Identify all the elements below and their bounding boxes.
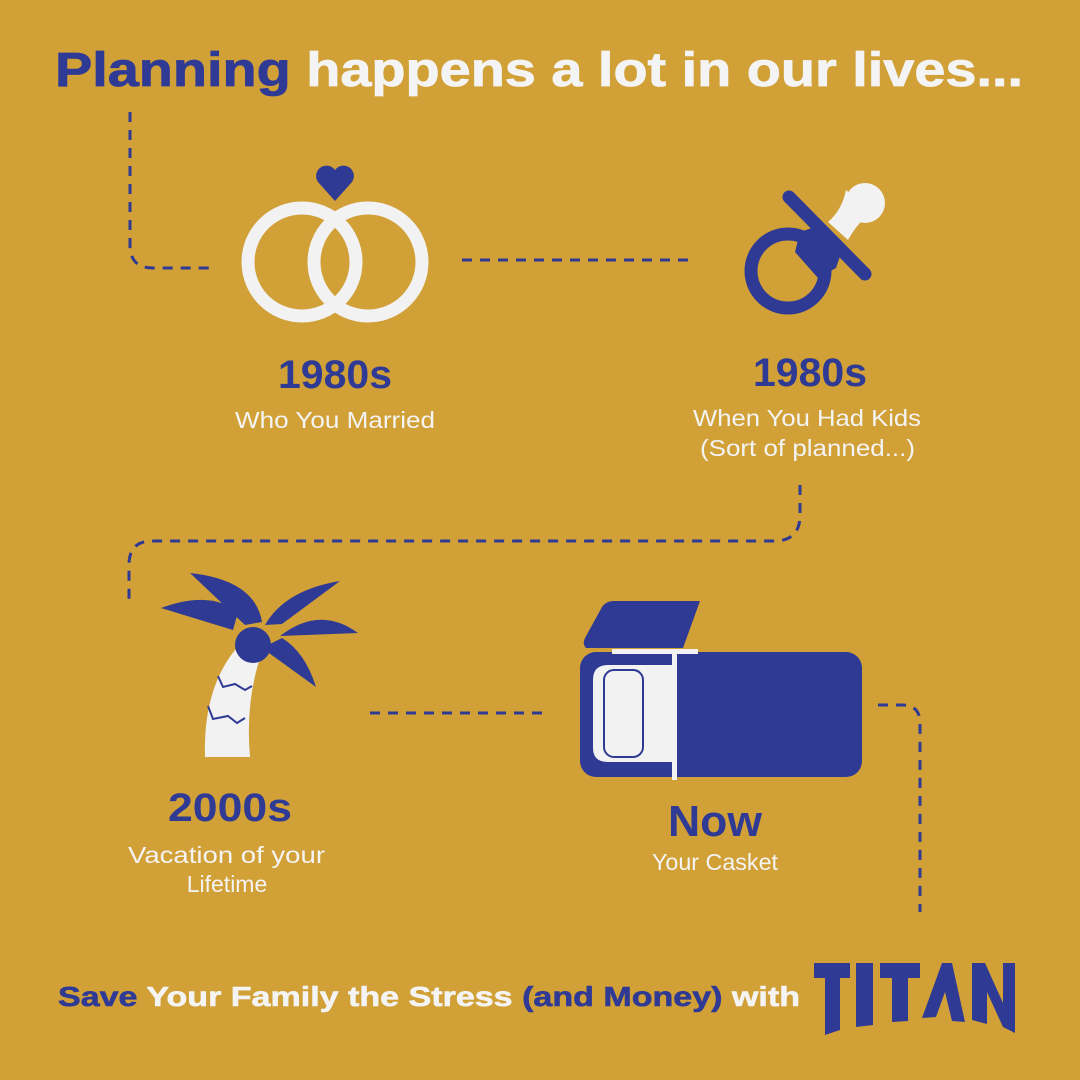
dashed path 3 [129, 485, 800, 602]
title: Planning happens a lot in our lives... [55, 44, 1023, 97]
label: now casket [652, 797, 779, 875]
label: now casket: Now [668, 797, 763, 846]
dashed path 5 [878, 705, 920, 912]
label: 2000s vacation: Lifetime [187, 871, 267, 897]
label: 1980s married [235, 353, 435, 433]
label: 2000s vacation [128, 786, 325, 897]
dashed connector 2 [462, 258, 690, 262]
logo: TITAN [814, 963, 1015, 1035]
icon: palm tree [161, 573, 358, 757]
dashed connector 4 [370, 712, 550, 714]
footer tagline: Save Your Family the Stress (and Money) with [58, 981, 800, 1012]
label: 2000s vacation: Vacation of your [128, 842, 325, 868]
icon: pacifier [751, 183, 885, 308]
label: 1980s kids [693, 351, 921, 461]
label: 1980s kids: (Sort of planned...) [700, 435, 915, 461]
label: 1980s married: Who You Married [235, 407, 435, 433]
label: 1980s kids: 1980s [753, 351, 867, 395]
dashed path 1 [130, 112, 215, 268]
icon: casket [580, 601, 862, 780]
label: 1980s married: 1980s [278, 353, 392, 397]
label: 1980s kids: When You Had Kids [693, 405, 921, 431]
label: 2000s vacation: 2000s [168, 786, 292, 830]
label: now casket: Your Casket [652, 849, 779, 875]
icon: wedding rings [248, 166, 422, 316]
